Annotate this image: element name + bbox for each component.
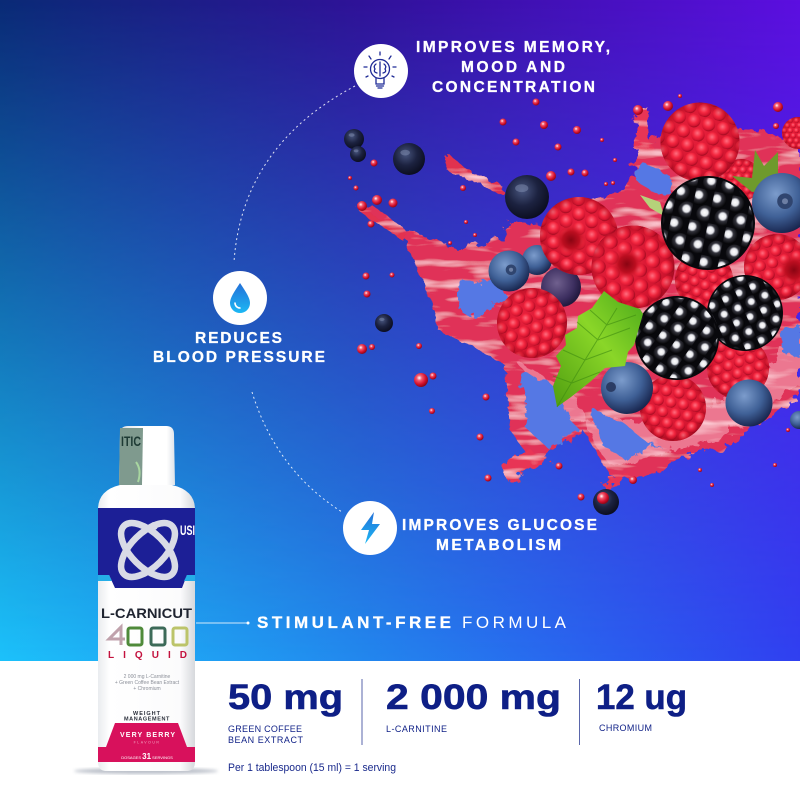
heading: reduces blood pressure: REDUCES bbox=[195, 330, 282, 347]
product bottle bbox=[74, 426, 218, 774]
strawberry calyx bbox=[732, 150, 778, 192]
ingredient lines: 2 000 mg L-Carnitine bbox=[124, 674, 171, 680]
dotted connector arcs bbox=[234, 86, 355, 512]
product name: L-CARNICUT bbox=[101, 605, 192, 621]
ingredient lines: + Green Coffee Bean Extract bbox=[115, 680, 180, 686]
heading: improves memory: IMPROVES MEMORY, bbox=[416, 39, 610, 56]
droplets bbox=[348, 94, 790, 500]
flavour text: VERY BERRY bbox=[120, 732, 175, 739]
stat: chromium: 12 ug bbox=[596, 678, 687, 717]
stat: green coffee bean extract bbox=[228, 678, 343, 745]
icon: water drop bbox=[213, 271, 267, 325]
bottle shadow bbox=[74, 768, 218, 774]
callout: stimulant-free formula: FORMULA bbox=[462, 613, 567, 632]
heading: reduces blood pressure: BLOOD PRESSURE bbox=[153, 349, 325, 366]
berry splash illustration bbox=[344, 94, 800, 515]
benefit: glucose metabolism bbox=[343, 501, 597, 555]
callout: stimulant-free formula bbox=[196, 613, 567, 632]
liquid: LIQUID bbox=[108, 650, 187, 661]
mint leaf bbox=[553, 291, 643, 407]
stat: chromium: CHROMIUM bbox=[599, 723, 652, 733]
white bottom band bbox=[0, 661, 800, 800]
divider bbox=[579, 679, 580, 745]
stat: l-carnitine: L-CARNITINE bbox=[386, 724, 447, 734]
weight management: WEIGHT bbox=[133, 711, 161, 717]
heading: improves glucose metabolism: METABOLISM bbox=[436, 537, 561, 554]
benefit: blood pressure bbox=[153, 271, 325, 366]
navy label bbox=[98, 508, 195, 588]
divider bbox=[362, 679, 363, 745]
stat: l-carnitine: 2 000 mg bbox=[386, 678, 561, 717]
stat: green coffee bean extract: BEAN EXTRACT bbox=[228, 735, 304, 745]
weight management: MANAGEMENT bbox=[124, 716, 170, 722]
4000 bbox=[109, 627, 187, 645]
product bottle: FLAVOUR bbox=[134, 740, 160, 744]
stat: green coffee bean extract: 50 mg bbox=[228, 678, 343, 717]
icon: light bulb with brain bbox=[354, 44, 408, 98]
cyan stripe bbox=[98, 575, 195, 581]
heading: improves memory: MOOD AND bbox=[461, 59, 565, 76]
benefit: memory bbox=[354, 39, 610, 98]
icon: lightning bolt bbox=[343, 501, 397, 555]
body bbox=[98, 485, 195, 771]
brand text: USI bbox=[180, 522, 195, 538]
flavour band bbox=[98, 723, 195, 762]
cap: ITIC bbox=[121, 433, 141, 449]
stat: green coffee bean extract: GREEN COFFEE bbox=[228, 724, 302, 734]
servings: DOSAGES 31 SERVINGS bbox=[121, 752, 173, 761]
stat: l-carnitine bbox=[386, 678, 561, 734]
heading: improves memory: CONCENTRATION bbox=[432, 79, 595, 96]
small leaf bbox=[640, 195, 664, 216]
blue see-through patches bbox=[460, 160, 800, 460]
atom logo bbox=[112, 514, 184, 586]
cap bbox=[119, 426, 175, 485]
juice splash bbox=[356, 108, 800, 502]
loose blueberries bbox=[344, 129, 800, 515]
ingredient lines: + Chromium bbox=[133, 686, 161, 692]
serving note: Per 1 tablespoon (15 ml) = 1 serving bbox=[228, 762, 396, 774]
heading: improves glucose metabolism: IMPROVES GLUCOSE bbox=[402, 517, 597, 534]
callout: stimulant-free formula: STIMULANT-FREE bbox=[257, 613, 451, 632]
berry cluster bbox=[487, 94, 800, 446]
